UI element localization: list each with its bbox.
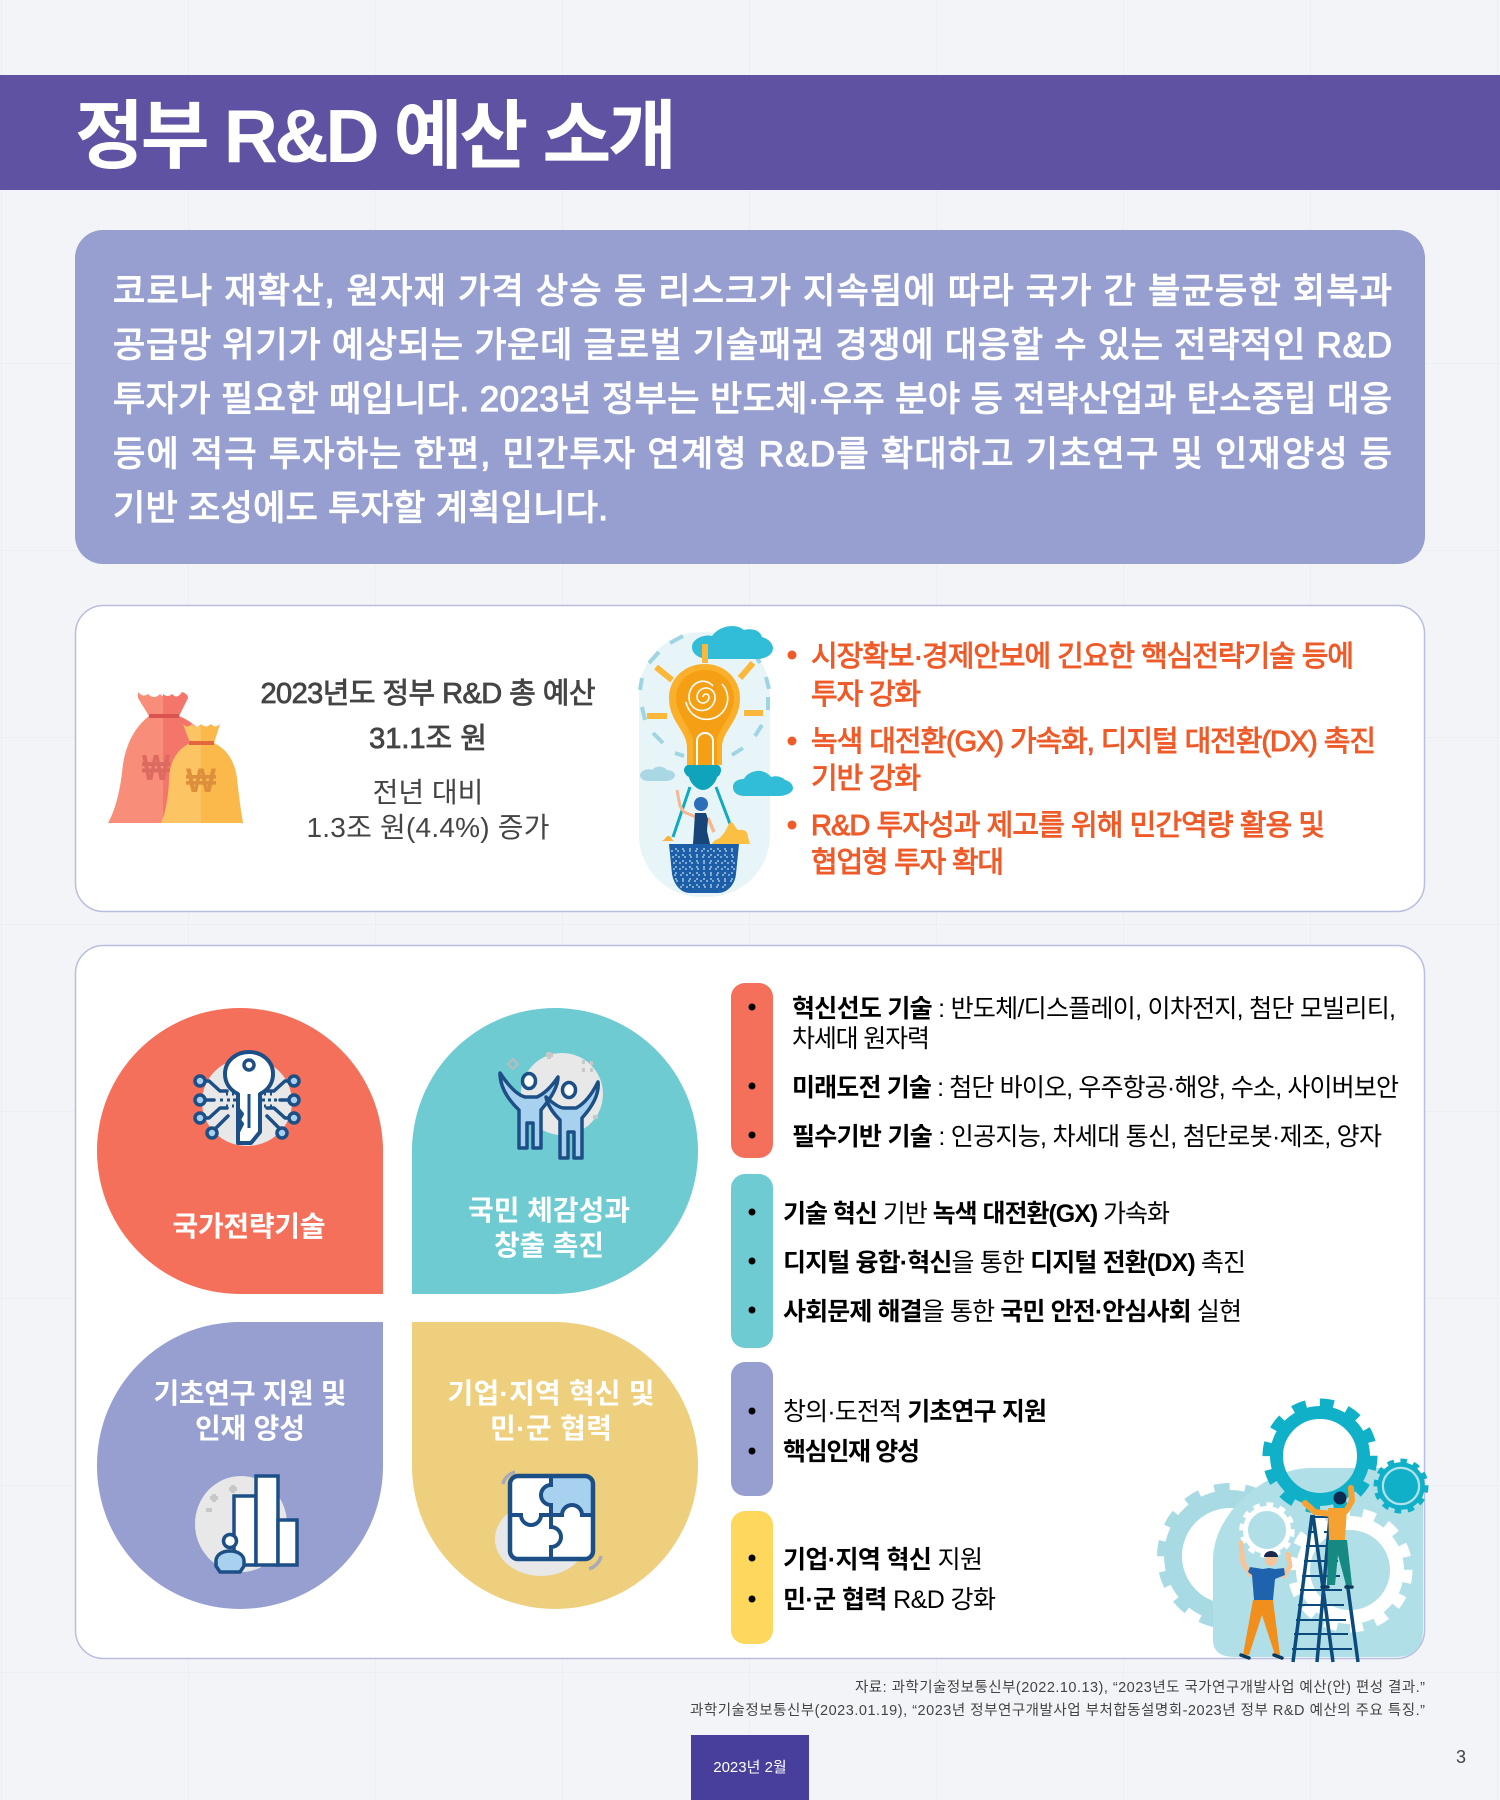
- source notes: [690, 1679, 1425, 1719]
- budget text: 전년 대비: [373, 777, 483, 808]
- title banner: [0, 75, 1500, 190]
- list: public-perceived results: 사회문제 해결을 통한 국민 안전·안심사회 실현: [783, 1298, 1242, 1326]
- list: national strategic technology: 혁신선도 기술 : 반도체/디스플레이, 이차전지, 첨단 모빌리티,: [792, 995, 1396, 1023]
- list: enterprise and regional: 기업·지역 혁신 지원: [783, 1546, 983, 1574]
- list: public-perceived results: 기술 혁신 기반 녹색 대전환(GX) 가속화: [783, 1200, 1170, 1228]
- petal: enterprise, regional and civil-military: [412, 1322, 698, 1609]
- icon: money bags: ₩: [142, 747, 170, 788]
- panel: total budget: [76, 606, 1424, 912]
- intro text: 코로나 재확산, 원자재 가격 상승 등 리스크가 지속됨에 따라 국가 간 불균등한 회복과: [113, 272, 1392, 311]
- icon: puzzle: [495, 1472, 601, 1576]
- list: basic research and talent: 창의·도전적 기초연구 지원: [783, 1398, 1047, 1426]
- list: national strategic technology: 차세대 원자력: [792, 1025, 930, 1053]
- panel: four investment areas: [76, 946, 1426, 1662]
- intro text: 공급망 위기가 예상되는 가운데 글로벌 기술패권 경쟁에 대응할 수 있는 전략적인 R&D: [113, 326, 1392, 365]
- icon: two people cheering: [500, 1052, 603, 1158]
- list: basic research and talent: 핵심인재 양성: [783, 1438, 920, 1466]
- strategy bullets: R&D 투자성과 제고를 위해 민간역량 활용 및: [811, 809, 1325, 842]
- petal: basic research and talent: 인재 양성: [195, 1413, 305, 1444]
- illustration: light bulb balloon: [639, 626, 793, 897]
- strategy bullets: 녹색 대전환(GX) 가속화, 디지털 대전환(DX) 촉진: [811, 725, 1376, 758]
- source notes: 과학기술정보통신부(2023.01.19), “2023년 정부연구개발사업 부처합동설명회-2023년 정부 R&D 예산의 주요 특징.”: [690, 1702, 1425, 1719]
- list: public-perceived results: [731, 1174, 1246, 1348]
- petal: basic research and talent: [97, 1322, 383, 1609]
- list: enterprise and regional: [731, 1511, 996, 1644]
- icon: key with circuits: [195, 1052, 299, 1146]
- strategy bullets: 기반 강화: [811, 763, 921, 795]
- petal: enterprise, regional and civil-military: 민·군 협력: [490, 1413, 612, 1444]
- petal: basic research and talent: 기초연구 지원 및: [154, 1378, 346, 1409]
- strategy bullets: 시장확보·경제안보에 긴요한 핵심전략기술 등에: [811, 640, 1354, 673]
- intro text: 투자가 필요한 때입니다. 2023년 정부는 반도체·우주 분야 등 전략산업과 탄소중립 대응: [113, 380, 1392, 419]
- budget text: 1.3조 원(4.4%) 증가: [306, 812, 550, 843]
- illustration: people and gears: [1161, 1402, 1426, 1662]
- intro text: [113, 272, 1392, 528]
- intro text: 등에 적극 투자하는 한편, 민간투자 연계형 R&D를 확대하고 기초연구 및 인재양성 등: [113, 435, 1392, 474]
- petal: public-perceived results: 국민 체감성과: [468, 1195, 630, 1226]
- list: national strategic technology: 필수기반 기술 : 인공지능, 차세대 통신, 첨단로봇·제조, 양자: [792, 1123, 1382, 1151]
- date tab: 2023년 2월: [713, 1759, 787, 1776]
- budget text: 2023년도 정부 R&D 총 예산: [260, 678, 596, 710]
- strategy bullets: [788, 640, 1376, 879]
- list: enterprise and regional: 민·군 협력 R&D 강화: [783, 1586, 996, 1614]
- icon: money bags: ₩: [186, 762, 217, 800]
- list: basic research and talent: [731, 1362, 1047, 1496]
- petal: national strategic technology: [97, 1008, 383, 1294]
- list: national strategic technology: [731, 983, 1399, 1158]
- intro text: 기반 조성에도 투자할 계획입니다.: [113, 489, 608, 528]
- strategy bullets: 투자 강화: [811, 679, 921, 711]
- petal: public-perceived results: [412, 1008, 698, 1294]
- date tab: [691, 1735, 809, 1800]
- strategy bullets: 협업형 투자 확대: [811, 846, 1004, 879]
- petal: enterprise, regional and civil-military: 기업·지역 혁신 및: [448, 1378, 654, 1409]
- petal: national strategic technology: 국가전략기술: [172, 1211, 326, 1242]
- panel: introduction: [75, 230, 1425, 564]
- source notes: 자료: 과학기술정보통신부(2022.10.13), “2023년도 국가연구개발사업 예산(안) 편성 결과.”: [855, 1679, 1425, 1696]
- icon: money bags: [108, 692, 243, 823]
- page number: 3: [1456, 1747, 1466, 1767]
- budget text: 31.1조 원: [369, 723, 487, 755]
- petal: public-perceived results: 창출 촉진: [494, 1230, 604, 1261]
- budget text: [260, 678, 596, 843]
- title: 정부 R&D 예산 소개: [75, 94, 677, 178]
- icon: bar chart and person: [195, 1476, 297, 1572]
- list: public-perceived results: 디지털 융합·혁신을 통한 디지털 전환(DX) 촉진: [783, 1249, 1246, 1277]
- list: national strategic technology: 미래도전 기술 : 첨단 바이오, 우주항공·해양, 수소, 사이버보안: [792, 1074, 1399, 1102]
